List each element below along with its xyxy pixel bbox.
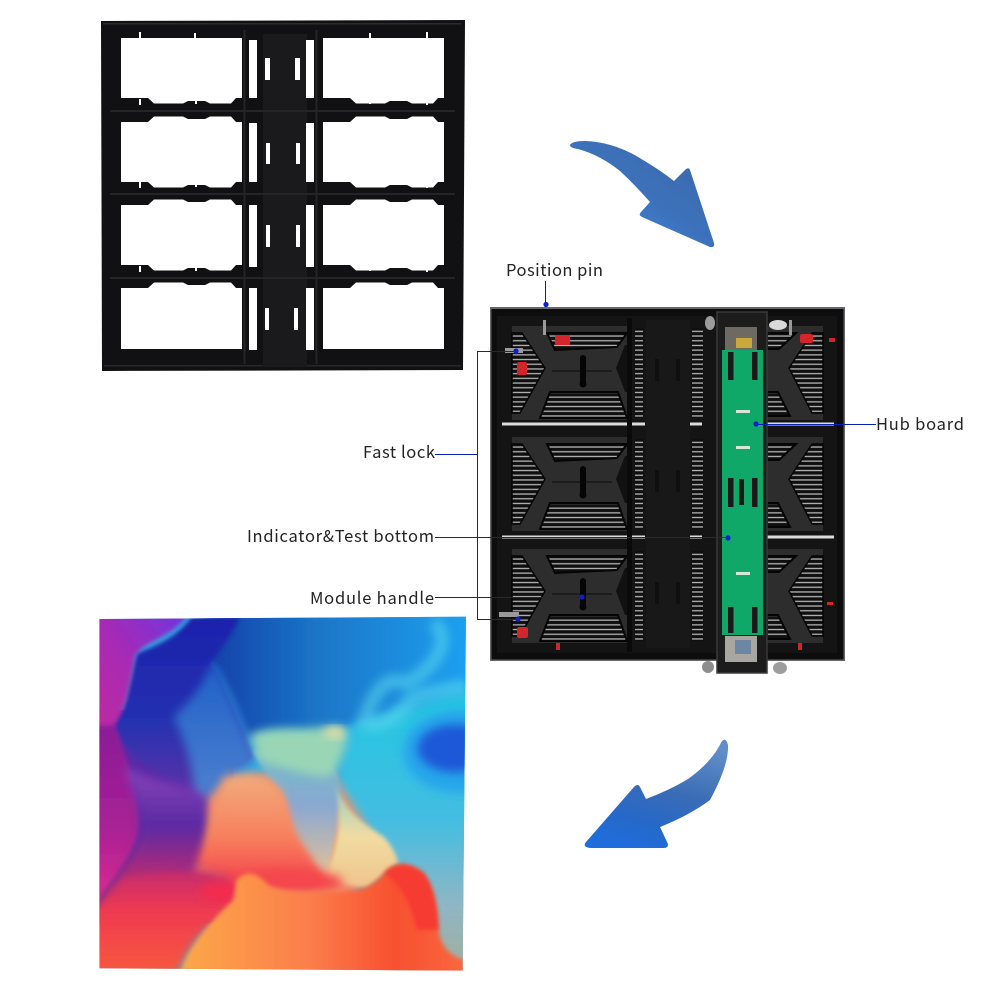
magenta left [99, 724, 142, 900]
right blue swirl halo [401, 707, 466, 796]
left module row 2 [512, 437, 628, 531]
leader: fast lock [435, 352, 518, 620]
callout dots [513, 302, 759, 622]
panel: cabinet rear view [490, 307, 845, 674]
callouts [435, 281, 876, 620]
centre vents row 3 [635, 551, 703, 641]
red crest [385, 866, 438, 930]
teal lower right [342, 692, 466, 970]
cream fold [323, 783, 398, 888]
pale teal highlight [250, 725, 347, 777]
left module row 1 [512, 326, 628, 420]
cross bars [502, 422, 834, 538]
cyan ribbon [363, 622, 467, 724]
cabinet housing [490, 307, 845, 661]
left underlay [90, 710, 233, 923]
panel: colourful display image [99, 616, 466, 971]
board connectors [728, 352, 758, 633]
right module row 2 [767, 437, 823, 531]
royal blue fold [173, 662, 257, 807]
board chips [736, 410, 750, 575]
left column openings [121, 38, 242, 349]
label: fast lock: Fast lock [363, 439, 435, 463]
red latches [517, 334, 835, 650]
left module row 3 [512, 549, 628, 643]
centre vents row 2 [635, 439, 703, 529]
label: position pin: Position pin [506, 257, 603, 281]
right blue swirl [412, 718, 465, 778]
centre vents row 1 [635, 328, 703, 418]
art background [90, 610, 477, 977]
cable bays [725, 327, 757, 662]
indigo fold [115, 617, 253, 790]
vertical rail [627, 318, 632, 652]
leader: position pin [544, 281, 546, 304]
green hub board [722, 350, 763, 635]
leader: indicator and test bottom [435, 536, 728, 538]
hot pink glow [200, 882, 240, 902]
label: indicator and test bottom: Indicator&Test bottom [247, 523, 434, 547]
right column openings [323, 38, 444, 349]
orange foreground [180, 864, 467, 977]
hub board housing [717, 312, 767, 673]
panel: empty cabinet frame [101, 20, 465, 371]
purple upper left [99, 618, 188, 750]
lock hardware [499, 320, 792, 617]
peach fold [197, 775, 323, 887]
leader: module handle [435, 596, 582, 598]
frame body [101, 20, 465, 371]
side cable blobs [702, 316, 787, 674]
pink red lower left [99, 864, 236, 969]
arrow: frame to assembled cabinet [570, 141, 714, 247]
sky blue field [203, 610, 477, 740]
centre channel [646, 320, 690, 648]
leader: hub board [756, 424, 876, 426]
right module row 3 [767, 549, 823, 643]
lower middle underlay [190, 766, 378, 896]
cream streak [324, 727, 346, 738]
purple centre [120, 767, 208, 873]
arrow: assembled cabinet to display [585, 740, 728, 848]
narrow slots and centre slits [139, 32, 428, 350]
blue grey fold [253, 745, 341, 880]
label: hub board: Hub board [876, 411, 964, 435]
label: module handle: Module handle [310, 585, 434, 609]
right module row 1 [767, 326, 823, 420]
red band under peach [265, 866, 348, 894]
